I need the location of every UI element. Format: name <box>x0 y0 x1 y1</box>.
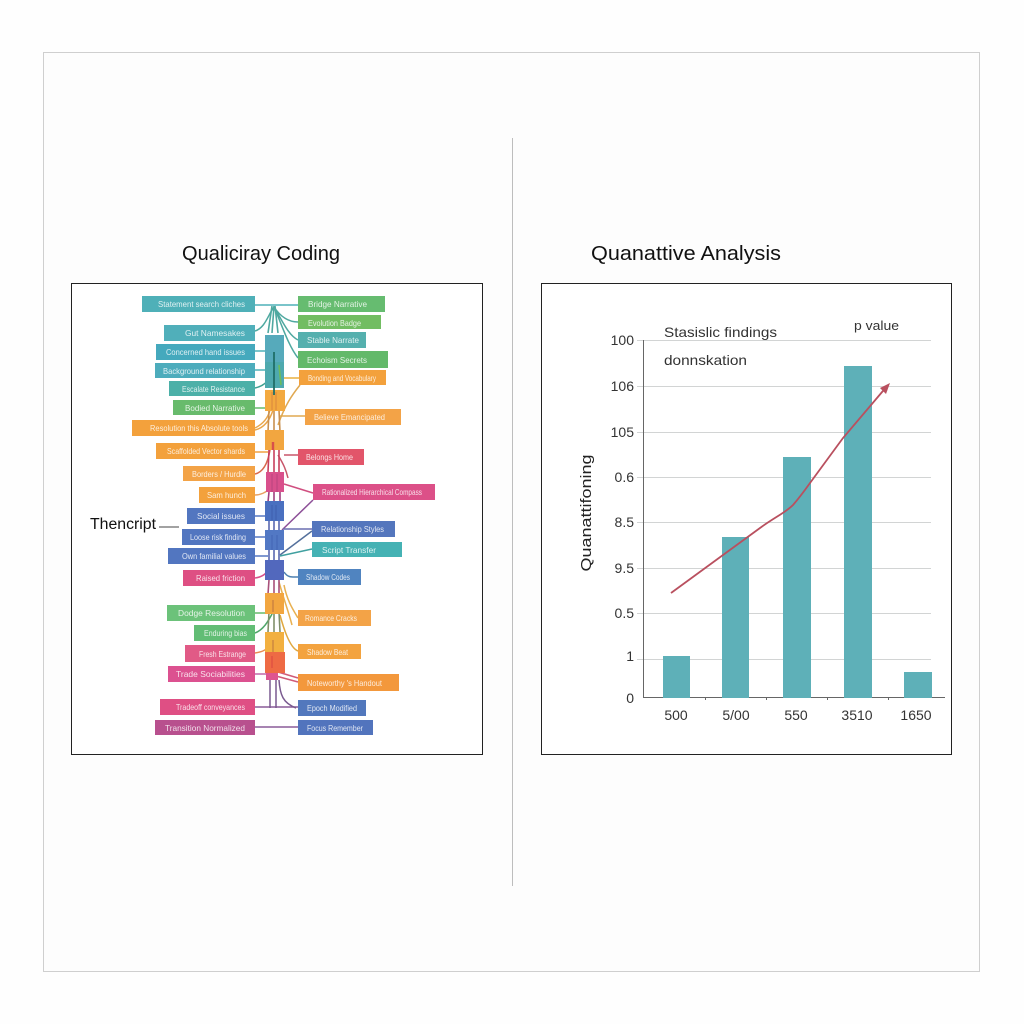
code label: Believe Emancipated <box>314 412 385 422</box>
code label <box>155 363 255 378</box>
code label <box>298 449 364 465</box>
code label <box>168 548 255 564</box>
label: transcript: Thencript <box>90 516 157 533</box>
code label: Scaffolded Vector shards <box>167 446 245 456</box>
code label <box>156 344 255 360</box>
code label: Resolution this Absolute tools <box>150 423 248 433</box>
code label: Stable Narrate <box>307 335 359 345</box>
code label <box>298 700 366 716</box>
code label: Rationalized Hierarchical Compass <box>322 487 422 497</box>
code label: Epoch Modified <box>307 703 357 713</box>
code label <box>298 674 399 691</box>
right code labels <box>298 296 435 735</box>
x axis ticks: 1650 <box>900 707 932 723</box>
code label: Shadow Codes <box>306 572 350 582</box>
connector lines <box>255 305 313 727</box>
trend line with arrow <box>671 383 890 593</box>
code label <box>298 351 388 368</box>
code label <box>299 370 386 385</box>
y axis ticks: 1 <box>626 648 634 664</box>
code label: Fresh Estrange <box>199 649 246 659</box>
y axis ticks: 106 <box>611 378 634 394</box>
code label: Script Transfer <box>322 545 376 555</box>
centre divider <box>512 138 514 886</box>
code label <box>185 645 255 662</box>
axes <box>643 340 945 700</box>
code label: Relationship Styles <box>321 524 384 534</box>
statistic findings note: Stasislic findings <box>664 324 777 340</box>
code label <box>183 466 255 481</box>
code label <box>182 529 255 545</box>
code label: Dodge Resolution <box>178 608 245 618</box>
code label <box>169 381 255 396</box>
code label: Bonding and Vocabulary <box>308 373 377 383</box>
code label: Bodied Narrative <box>185 403 245 413</box>
code label: Enduring bias <box>204 628 247 638</box>
code label <box>298 610 371 626</box>
code label: Focus Remember <box>307 723 363 733</box>
y axis ticks: 100 <box>611 332 634 348</box>
code label <box>305 409 401 425</box>
code label <box>156 443 255 459</box>
code label <box>199 487 255 503</box>
code label <box>168 666 255 682</box>
code label <box>298 315 381 329</box>
code label: Social issues <box>197 511 245 521</box>
y axis ticks: 0.5 <box>615 605 634 621</box>
code label: Statement search cliches <box>158 299 245 309</box>
code label: Trade Sociabilities <box>176 669 245 679</box>
panel: quantitative analysis chart <box>542 284 952 754</box>
y axis ticks: 105 <box>611 424 634 440</box>
x axis ticks: 5/00 <box>722 707 750 723</box>
bars <box>663 366 932 698</box>
heading: qualitative coding: Qualiciray Coding <box>182 243 340 265</box>
code label: Background relationship <box>163 366 245 376</box>
code label: Noteworthy 's Handout <box>307 678 383 688</box>
documentation note: donnskation <box>664 352 747 368</box>
code label <box>155 720 255 735</box>
code label <box>298 569 361 585</box>
code label <box>298 644 361 659</box>
y axis ticks: 8.5 <box>615 514 634 530</box>
panel: qualitative coding diagram <box>72 284 482 754</box>
code label: Borders / Hurdle <box>192 469 246 479</box>
y axis ticks: 9.5 <box>615 560 634 576</box>
code label <box>187 508 255 524</box>
y axis ticks: 0.6 <box>615 469 634 485</box>
code label: Transition Normalized <box>165 723 245 733</box>
code label: Shadow Beat <box>307 647 349 657</box>
code label <box>183 570 255 586</box>
code label <box>164 325 255 341</box>
code label <box>142 296 255 312</box>
code label <box>167 605 255 621</box>
gridlines <box>637 340 931 660</box>
code label: Concerned hand issues <box>166 347 245 357</box>
code label <box>160 699 255 715</box>
central code spine <box>268 306 280 632</box>
code label <box>298 720 373 735</box>
code label: Bridge Narrative <box>308 299 367 309</box>
code label: Romance Cracks <box>305 613 357 623</box>
code label: Raised friction <box>196 573 245 583</box>
code label: Sam hunch <box>207 490 246 500</box>
code label: Loose risk finding <box>190 532 246 542</box>
code label <box>298 296 385 312</box>
code label <box>194 625 255 641</box>
code label: Gut Namesakes <box>185 328 245 338</box>
x axis ticks: 3510 <box>841 707 873 723</box>
strands over code blocks <box>272 352 281 668</box>
code label <box>312 521 395 537</box>
code label: Evolution Badge <box>308 318 361 328</box>
code label <box>132 420 255 436</box>
heading: quantitative analysis: Quanattive Analysis <box>591 243 781 265</box>
y axis ticks <box>611 332 634 706</box>
y axis ticks: 0 <box>626 690 634 706</box>
code label: Escalate Resistance <box>182 384 245 394</box>
code label: Belongs Home <box>306 452 353 462</box>
code label: Echoism Secrets <box>307 355 367 365</box>
y axis title: Quanattifoning <box>578 454 595 572</box>
code label: Tradeoff conveyances <box>176 702 245 712</box>
x axis ticks: 550 <box>784 707 808 723</box>
code label: Own familial values <box>182 551 246 561</box>
left code labels <box>132 296 255 735</box>
p value note: p value <box>854 318 899 333</box>
x axis ticks <box>664 707 932 723</box>
x axis ticks: 500 <box>664 707 688 723</box>
code label <box>298 332 366 348</box>
code label <box>312 542 402 557</box>
code label <box>173 400 255 415</box>
code label <box>313 484 435 500</box>
central code blocks <box>265 335 285 680</box>
